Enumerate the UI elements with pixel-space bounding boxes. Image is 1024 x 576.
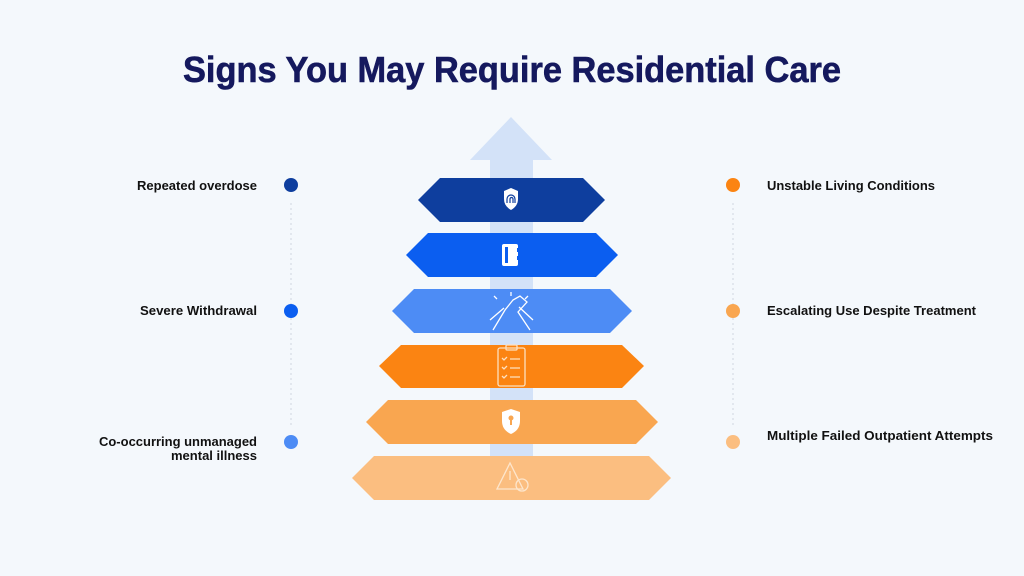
left item 3	[99, 434, 298, 463]
title: Signs You May Require Residential Care	[183, 49, 841, 90]
pyramid bands	[352, 178, 671, 500]
band 5: medium orange	[366, 400, 658, 444]
right item 3	[726, 428, 993, 449]
band 3: light blue	[392, 289, 632, 333]
left item 2: Severe Withdrawal	[140, 303, 257, 318]
left timeline	[99, 178, 298, 463]
left item 1: Repeated overdose	[137, 178, 257, 193]
right timeline	[726, 178, 993, 449]
right item 2: Escalating Use Despite Treatment	[767, 303, 977, 318]
band 2: blue	[406, 233, 618, 277]
band 1: dark blue	[418, 178, 605, 222]
left item 3: mental illness	[171, 448, 257, 463]
band 6: light orange	[352, 456, 671, 500]
right item 3: Multiple Failed Outpatient Attempts	[767, 428, 993, 443]
arrow: upward background	[470, 117, 552, 470]
band 4: orange	[379, 345, 644, 388]
left item 3: Co-occurring unmanaged	[99, 434, 257, 449]
right item 1: Unstable Living Conditions	[767, 178, 935, 193]
